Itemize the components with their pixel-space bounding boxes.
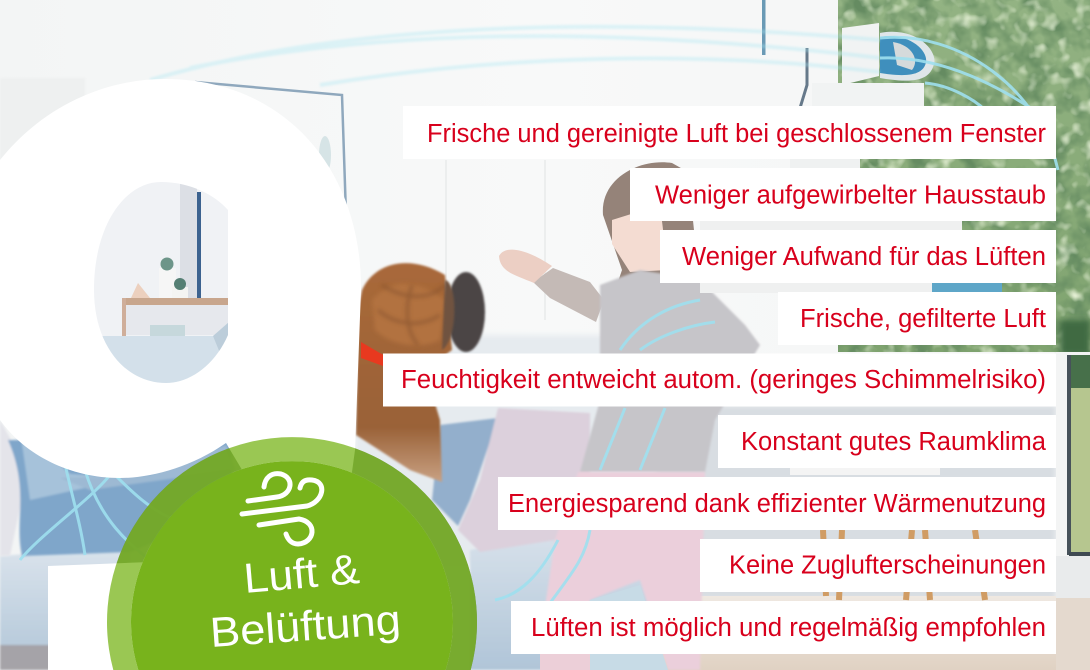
wall panels centre [446, 160, 545, 320]
girl face [612, 205, 668, 272]
girl hair [603, 162, 700, 330]
label 8 [700, 539, 1056, 592]
darker backdrop behind badge ring [107, 437, 477, 670]
label 7: Energiesparend dank effizienter Wärmenutzung [508, 490, 1046, 518]
badge title: Luft & [242, 545, 361, 602]
badge inner disc [131, 461, 453, 670]
label 6 [718, 415, 1056, 468]
girl trousers [540, 472, 705, 670]
sofa seat [0, 520, 650, 670]
label 5: Feuchtigkeit entweicht autom. (geringes Schimmelrisiko) [401, 366, 1046, 394]
dog [356, 263, 485, 482]
outdoor trees [838, 0, 1090, 355]
label 6: Konstant gutes Raumklima [741, 428, 1047, 456]
label 8: Keine Zuglufterscheinungen [729, 552, 1046, 580]
label 4: Frische, gefilterte Luft [800, 305, 1046, 333]
interior shelf seen through hole [94, 180, 229, 386]
label 3 [660, 230, 1056, 283]
benefit labels [383, 106, 1056, 654]
label 7 [498, 477, 1056, 530]
badge title: Belüftung [208, 596, 402, 656]
garden window bottom right [1056, 352, 1090, 670]
label 9: Lüften ist möglich und regelmäßig empfohlen [531, 614, 1046, 642]
big white letter shape [0, 79, 361, 670]
cushions right [432, 408, 590, 552]
label 2 [630, 168, 1056, 221]
table and legs [790, 468, 985, 600]
label 4 [778, 292, 1056, 345]
dog collar [361, 342, 385, 366]
green badge [107, 437, 477, 670]
girl sweater [580, 270, 760, 472]
label 9 [511, 601, 1056, 654]
label 1 [403, 106, 1056, 159]
icon: wind [242, 474, 322, 544]
label 3: Weniger Aufwand für das Lüften [682, 243, 1046, 271]
girl [499, 162, 760, 670]
sofa back [355, 335, 655, 565]
label 2: Weniger aufgewirbelter Hausstaub [655, 182, 1046, 210]
ventilation device [842, 23, 934, 85]
background furniture zone [655, 405, 1056, 600]
badge title [208, 545, 402, 656]
label 1: Frische und gereinigte Luft bei geschlossenem Fenster [427, 120, 1047, 148]
badge outer ring [107, 437, 477, 670]
girl arm [533, 268, 604, 322]
label 5 [383, 354, 1056, 406]
wall clock [319, 136, 331, 174]
cushions left [0, 420, 235, 556]
window frame [700, 0, 1002, 293]
wall panel left [0, 78, 85, 378]
wall picture frame [195, 82, 346, 215]
floor [640, 596, 1090, 670]
